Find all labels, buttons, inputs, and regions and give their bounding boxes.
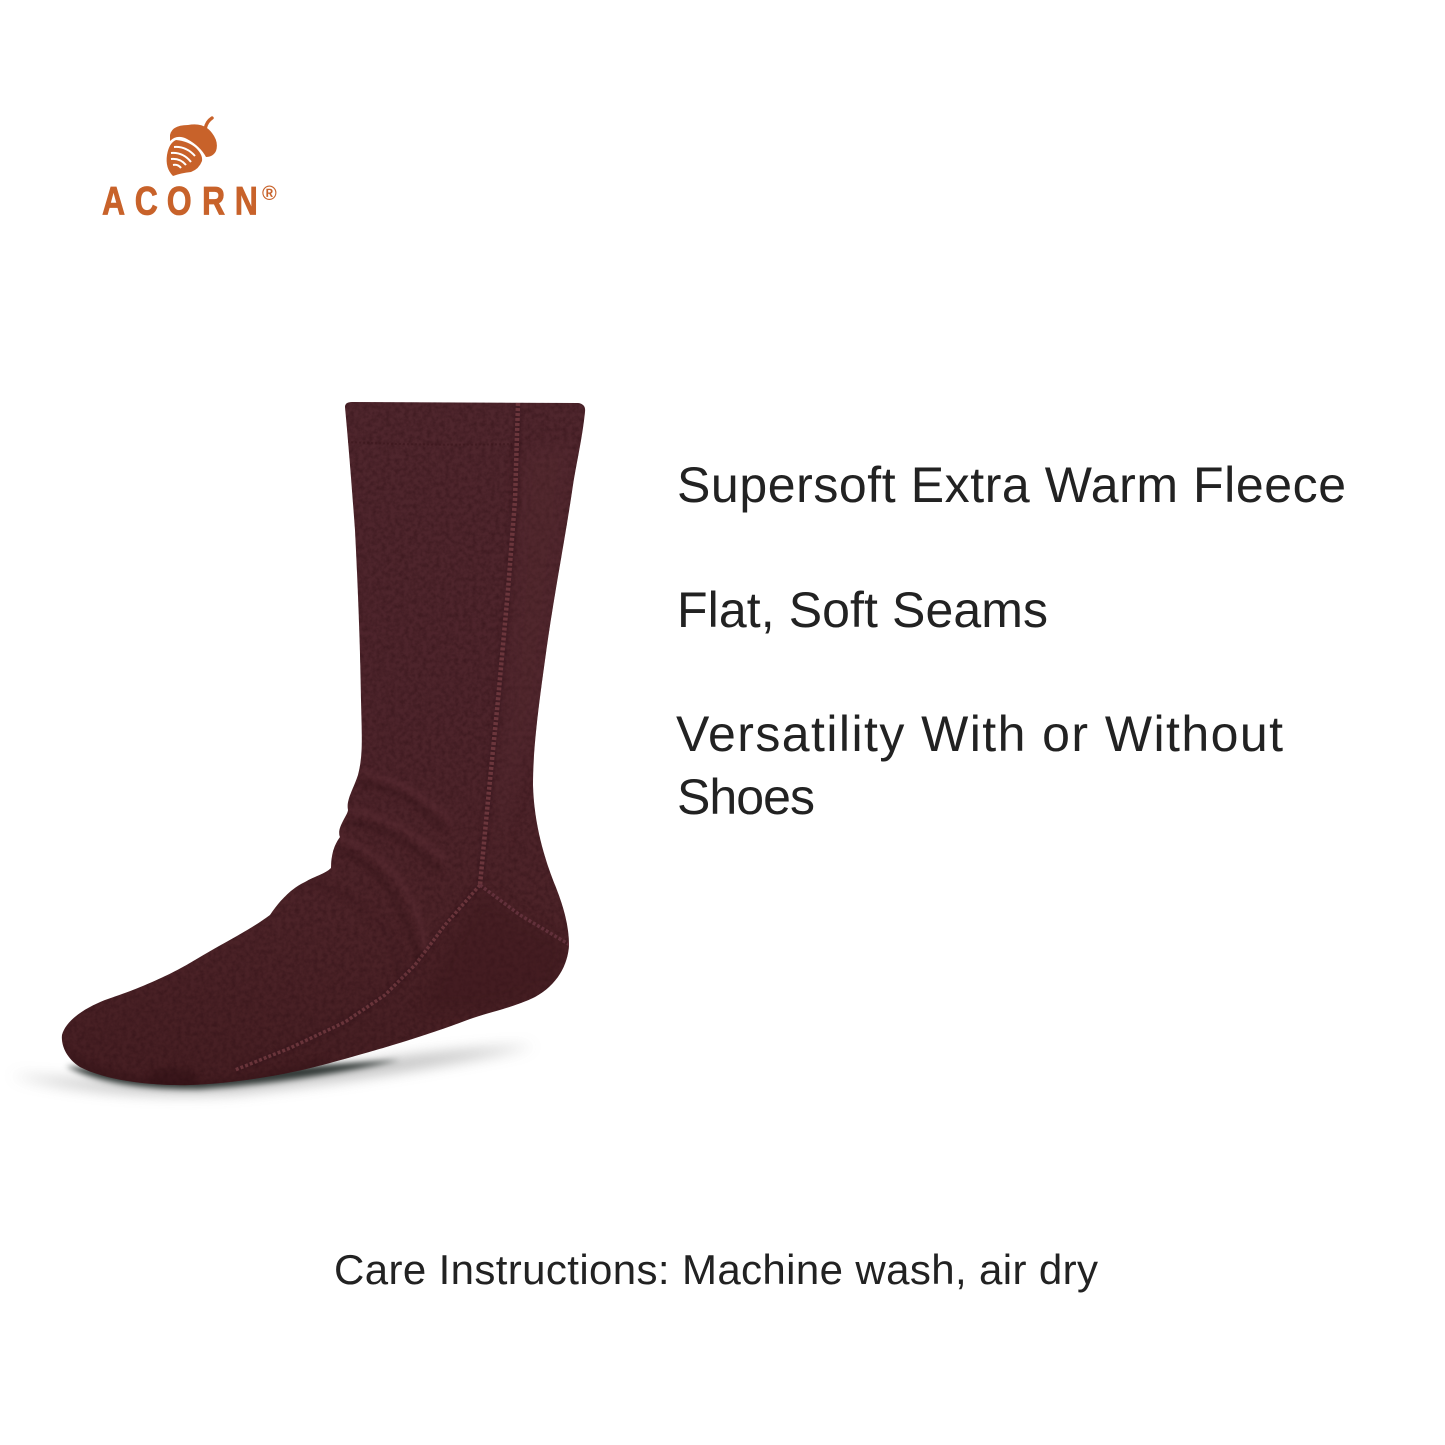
sock shading and seams xyxy=(60,403,575,1100)
care instructions: Care Instructions: Machine wash, air dry xyxy=(334,1246,1098,1293)
feature text block xyxy=(676,457,1346,825)
feature: versatility line two: Shoes xyxy=(677,769,815,825)
sock body xyxy=(62,402,585,1085)
back seam xyxy=(480,403,518,885)
feature: seams: Flat, Soft Seams xyxy=(677,582,1048,638)
wordmark: ACORN: ACORN xyxy=(102,178,258,223)
logo: Acorn brand xyxy=(102,118,277,223)
feature: fleece: Supersoft Extra Warm Fleece xyxy=(677,457,1346,513)
foot seams xyxy=(413,895,470,966)
icon: acorn xyxy=(167,118,217,176)
ankle gathers xyxy=(340,782,436,956)
sock shadow xyxy=(10,1046,535,1094)
feature: versatility line one: Versatility With or Without xyxy=(676,706,1283,762)
registered mark: ® xyxy=(262,183,277,205)
product image: fleece sock xyxy=(60,402,585,1100)
cuff stitching xyxy=(347,442,512,445)
